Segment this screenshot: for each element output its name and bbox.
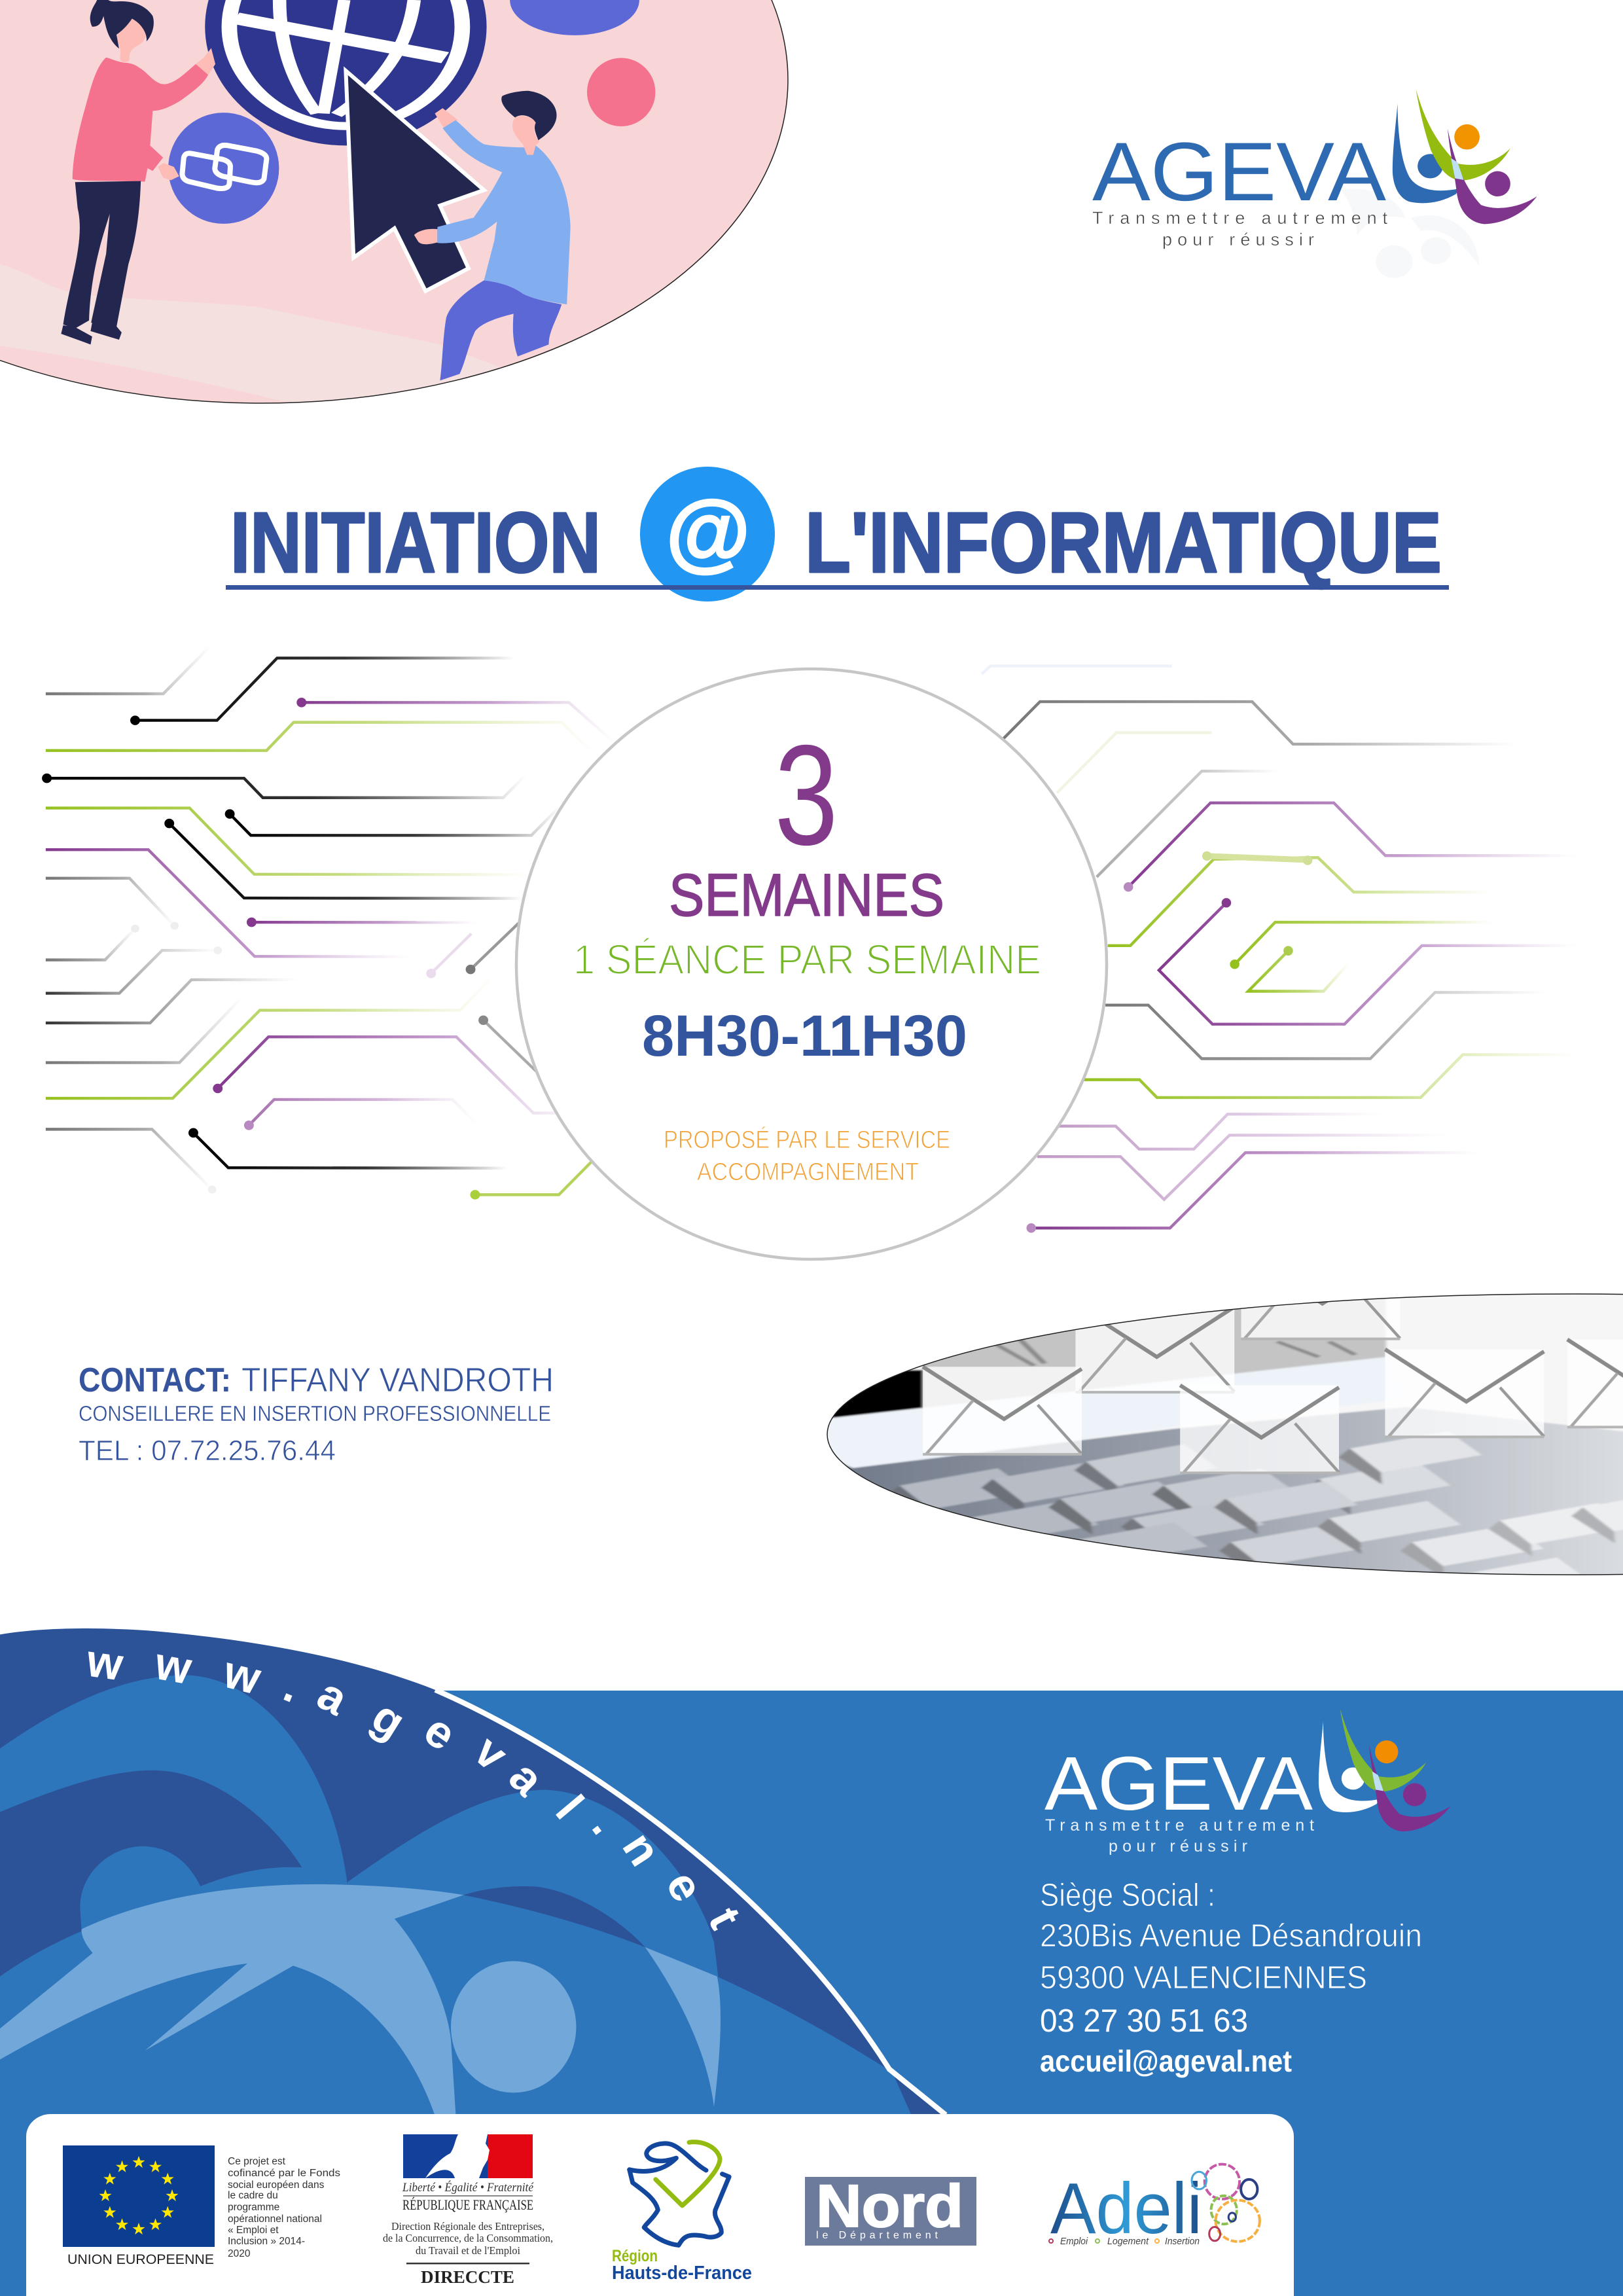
photo background (812, 1276, 1623, 1604)
logo tagline second line: pour réussir (1162, 230, 1314, 249)
Nord logo: Nord (816, 2173, 963, 2240)
sessions per week: 1 SÉANCE PAR SEMAINE (573, 936, 1041, 983)
footer logo tagline second line: pour réussir (1109, 1837, 1247, 1856)
contact phone: TEL : 07.72.25.76.44 (79, 1435, 336, 1467)
circuit lines left (42, 646, 615, 1200)
schedule: 8H30-11H30 (642, 1003, 967, 1068)
EU funding text: programme (228, 2202, 279, 2213)
logo wordmark: AGEVA (1092, 125, 1386, 218)
at sign circle (640, 467, 775, 601)
cursor arrow (346, 71, 484, 291)
globe (205, 0, 487, 145)
circuit lines right (982, 666, 1577, 1233)
circuit nodes right (1026, 852, 1312, 1233)
photo outline (827, 1294, 1623, 1575)
pink background ellipse (0, 0, 788, 403)
partner logos panel (26, 2114, 1294, 2296)
footer logo wordmark: AGEVA (1044, 1741, 1313, 1826)
city: 59300 VALENCIENNES (1040, 1960, 1367, 1996)
link icon circle (168, 113, 279, 224)
white edge line (435, 1690, 946, 2115)
Adeli logo: Adeli (1050, 2168, 1202, 2249)
direction line 1: Direction Régionale des Entreprises, (391, 2220, 544, 2233)
region label: Région (612, 2247, 658, 2265)
number 3: 3 (775, 715, 838, 874)
EU funding text: social européen dans (228, 2179, 325, 2191)
EU stars (99, 2156, 178, 2234)
street: 230Bis Avenue Désandrouin (1040, 1918, 1422, 1954)
semaines: SEMAINES (669, 862, 944, 929)
address block (1040, 1878, 1422, 2078)
EU funding text: opérationnel national (228, 2214, 322, 2225)
circle (516, 669, 1107, 1259)
central circle panel (516, 669, 1107, 1259)
EU funding text: le cadre du (228, 2190, 278, 2201)
light waves (0, 264, 518, 411)
logo: AGEVAL top (1092, 90, 1537, 278)
footer background (0, 1628, 1623, 2296)
motto: Liberté • Égalité • Fraternité (402, 2180, 534, 2195)
phone: 03 27 30 51 63 (1040, 2003, 1248, 2039)
pink circle (587, 58, 655, 126)
contact role: CONSEILLERE EN INSERTION PROFESSIONNELLE (79, 1401, 551, 1426)
EU funding text: « Emploi et (228, 2225, 279, 2236)
Adeli tagline: Emploi (1060, 2236, 1088, 2247)
footer blue panel (435, 1691, 1623, 2296)
footer logo tagline: Transmettre autrement (1045, 1816, 1314, 1835)
website curved text: www.ageval.net (83, 1634, 751, 1937)
proposed by line 1: PROPOSÉ PAR LE SERVICE (664, 1126, 950, 1154)
title right words: L'INFORMATIQUE (805, 494, 1442, 590)
EU funding text (228, 2156, 340, 2259)
title underline (226, 585, 1449, 590)
Nord logo: le Département (816, 2230, 938, 2241)
white panel (26, 2114, 1294, 2296)
region name: Hauts-de-France (612, 2263, 752, 2284)
contact name: TIFFANY VANDROTH (241, 1361, 554, 1399)
EU caption: UNION EUROPEENNE (67, 2252, 214, 2267)
EU funding text: 2020 (228, 2248, 251, 2259)
Hauts-de-France logo (612, 2142, 752, 2284)
EU funding text: Ce projet est (228, 2156, 286, 2167)
blue circle (510, 0, 639, 35)
Adeli tagline (1060, 2236, 1200, 2247)
EU funding text: Inclusion » 2014- (228, 2236, 305, 2247)
footer logo swooshes (1319, 1708, 1451, 1831)
light figure (0, 1884, 721, 2138)
keyboard keys (888, 1431, 1623, 1611)
republique francaise: RÉPUBLIQUE FRANÇAISE (402, 2197, 533, 2213)
French republic logo (383, 2134, 553, 2287)
EU funding text: cofinancé par le Fonds (228, 2168, 340, 2179)
illustration: people around a globe and cursor (0, 0, 788, 411)
contact label: CONTACT: (79, 1361, 231, 1399)
direction line 2: de la Concurrence, de la Consommation, (383, 2232, 553, 2244)
email: accueil@ageval.net (1040, 2044, 1292, 2078)
swoosh artwork (0, 1628, 946, 2296)
head office label: Siège Social : (1040, 1878, 1215, 1913)
at sign circle: @ (666, 483, 750, 579)
woman (61, 0, 215, 344)
illustration figures (stretched artwork) (0, 0, 655, 411)
direccte: DIRECCTE (421, 2267, 514, 2287)
Adeli tagline: Logement (1107, 2236, 1149, 2247)
logo swooshes (1341, 90, 1537, 278)
direction line 3: du Travail et de l'Emploi (416, 2244, 520, 2257)
footer logo (1044, 1708, 1451, 1856)
title left word: INITIATION (230, 494, 601, 590)
photo: keyboard with envelopes (812, 1251, 1623, 1611)
logo tagline: Transmettre autrement (1092, 208, 1387, 228)
tagline bullets (1049, 2239, 1159, 2243)
Adeli tagline: Insertion (1165, 2236, 1200, 2247)
envelopes (923, 1251, 1623, 1473)
circuit nodes left (42, 698, 488, 1200)
region map mark (630, 2142, 729, 2245)
gears (1192, 2164, 1260, 2242)
man (414, 91, 571, 380)
Marianne flag (403, 2134, 533, 2178)
contact block (79, 1361, 554, 1467)
title (226, 467, 1449, 601)
illustration ellipse outline (0, 0, 788, 403)
EU logo (63, 2145, 215, 2267)
proposed by line 2: ACCOMPAGNEMENT (697, 1158, 919, 1186)
